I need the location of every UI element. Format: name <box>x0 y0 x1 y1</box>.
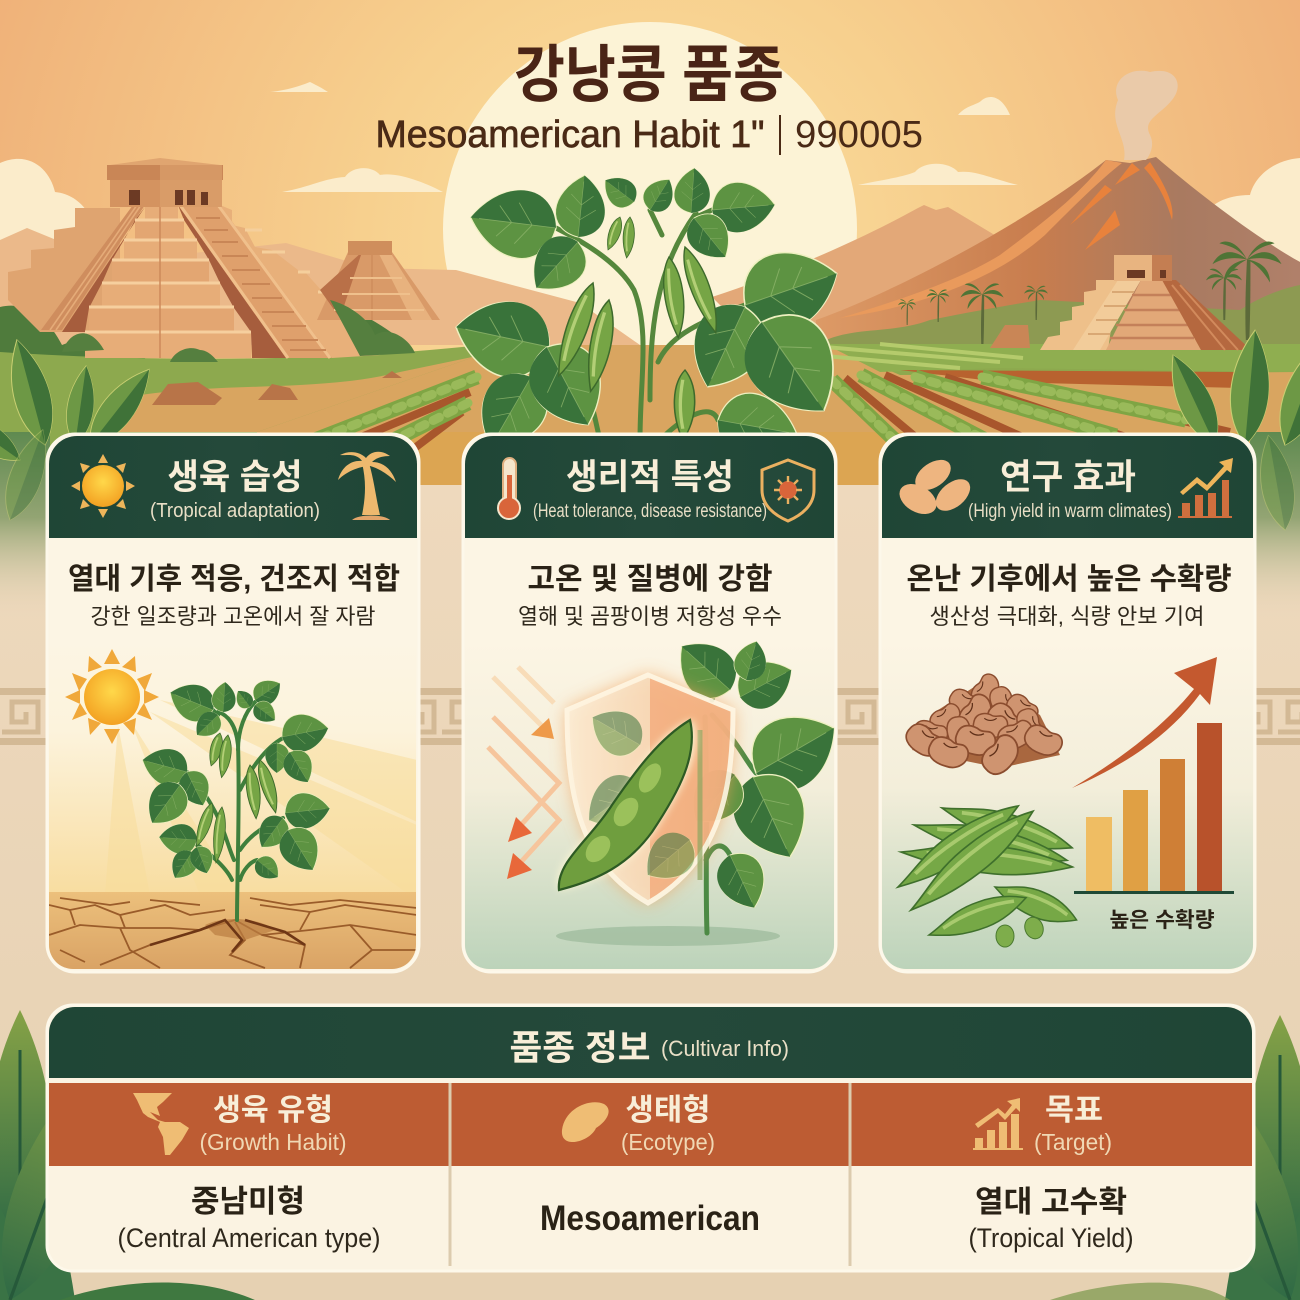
ground shadow <box>556 926 780 946</box>
plant: bean plant in dry soil <box>138 673 332 920</box>
panel: physiological traits <box>463 434 851 972</box>
info header <box>49 1007 1252 1078</box>
body text: 열해 및 곰팡이병 저항성 우수 <box>518 604 782 629</box>
label: ecotype: (Ecotype) <box>621 1129 715 1155</box>
subheading: (Heat tolerance, disease resistance) <box>533 501 767 522</box>
illustration: shield, pod and plant <box>465 628 851 969</box>
greek key band <box>0 688 1300 745</box>
label: ecotype <box>621 1094 715 1155</box>
red soil band <box>900 370 1240 388</box>
illustration: sun, plant and cracked earth <box>49 640 417 972</box>
value: tropical yield: 열대 고수확 <box>975 1186 1127 1219</box>
body heading: 고온 및 질병에 강함 <box>528 563 772 596</box>
label: target <box>1034 1094 1112 1155</box>
value: central american type: 중남미형 <box>191 1184 305 1219</box>
orange row <box>49 1083 1252 1166</box>
icon: shield with germ <box>762 460 814 521</box>
panel: growth habit <box>47 434 419 972</box>
column dividers <box>450 1083 850 1266</box>
background: far hills <box>0 228 640 345</box>
illustration: beans, pods and yield chart <box>882 640 1253 969</box>
soil band lower <box>257 432 1300 487</box>
hero bean plant <box>448 167 860 465</box>
tropical plants left <box>0 335 162 525</box>
palm trees <box>898 242 1282 345</box>
lower background <box>0 485 1300 1300</box>
shield <box>567 675 733 903</box>
panel header <box>49 436 417 538</box>
body heading: 열대 기후 적응, 건조지 적합 <box>68 563 400 596</box>
distant tree line <box>816 285 1300 345</box>
foliage bottom right <box>1050 1015 1300 1300</box>
value: mesoamerican: Mesoamerican <box>540 1199 760 1238</box>
panel: research effect <box>880 434 1255 972</box>
heading: 생리적 특성 <box>566 458 734 497</box>
foliage bottom left <box>0 1010 255 1300</box>
info heading: 품종 정보 <box>510 1029 650 1068</box>
subheading: (High yield in warm climates) <box>968 501 1172 522</box>
icon: beans <box>894 454 976 520</box>
right pyramid <box>1040 255 1251 350</box>
crop rows right <box>832 375 1230 450</box>
tropical plants right <box>1158 329 1300 533</box>
small pyramid <box>317 241 440 320</box>
crop rows left <box>315 377 477 450</box>
icon: palm tree <box>338 452 396 520</box>
arrow: rising yield <box>1072 657 1217 788</box>
value: central american type: (Central American type) <box>118 1223 380 1253</box>
panel header <box>465 436 834 538</box>
subtitle: Mesoamerican Habit 1" <box>376 114 764 156</box>
icon: thermometer <box>498 458 520 519</box>
label: target: 목표 <box>1045 1094 1103 1127</box>
background: mountain <box>712 205 1010 345</box>
small ruin <box>990 325 1030 348</box>
background: sky <box>0 0 1300 480</box>
heading: 생육 습성 <box>168 458 302 497</box>
pile of dry beans <box>901 670 1066 780</box>
background: clouds <box>0 82 1300 262</box>
background: sun disc <box>443 22 857 436</box>
icon: bean <box>562 1102 609 1142</box>
panel header <box>882 436 1253 538</box>
label: growth habit <box>200 1094 346 1155</box>
icon: chart <box>1178 458 1233 518</box>
icon: map of the Americas <box>133 1093 189 1155</box>
chart label: 높은 수확량 <box>1110 909 1214 932</box>
subheading: (Tropical adaptation) <box>150 500 320 522</box>
bean pod <box>558 720 696 890</box>
pile of green pods <box>890 794 1082 947</box>
volcano smoke <box>1115 71 1178 160</box>
right side greenery fade <box>1250 432 1300 622</box>
ground field <box>0 345 1300 490</box>
info subheading: (Cultivar Info) <box>661 1036 789 1061</box>
arrows: heat <box>488 667 559 879</box>
value: central american type <box>118 1184 380 1253</box>
green field band right <box>825 344 1300 372</box>
label: ecotype: 생태형 <box>626 1094 710 1127</box>
heading: 연구 효과 <box>1000 458 1136 497</box>
bushes near pyramid <box>62 300 415 362</box>
value: tropical yield: (Tropical Yield) <box>968 1223 1134 1253</box>
big pyramid <box>8 158 380 358</box>
dirt path and soil <box>110 345 1300 490</box>
upper field rows <box>825 344 1023 368</box>
trees behind pyramid <box>0 300 415 362</box>
panel: cultivar info <box>47 1005 1254 1271</box>
icon: chart <box>973 1098 1023 1150</box>
left side greenery fade <box>0 432 50 622</box>
title: 강낭콩 품종 <box>514 41 784 110</box>
plant behind shield <box>664 628 851 933</box>
value: tropical yield <box>968 1186 1134 1253</box>
label: growth habit: (Growth Habit) <box>200 1129 346 1155</box>
background: volcano <box>816 157 1300 345</box>
rocks <box>152 371 402 405</box>
label: growth habit: 생육 유형 <box>213 1094 333 1127</box>
bar chart <box>1074 723 1234 894</box>
subtitle: 990005 <box>795 114 923 156</box>
label: target: (Target) <box>1034 1129 1112 1155</box>
body heading: 온난 기후에서 높은 수확량 <box>906 563 1232 596</box>
body text: 생산성 극대화, 식량 안보 기여 <box>930 604 1204 629</box>
body text: 강한 일조량과 고온에서 잘 자람 <box>90 604 376 629</box>
icon: sun <box>71 454 135 518</box>
